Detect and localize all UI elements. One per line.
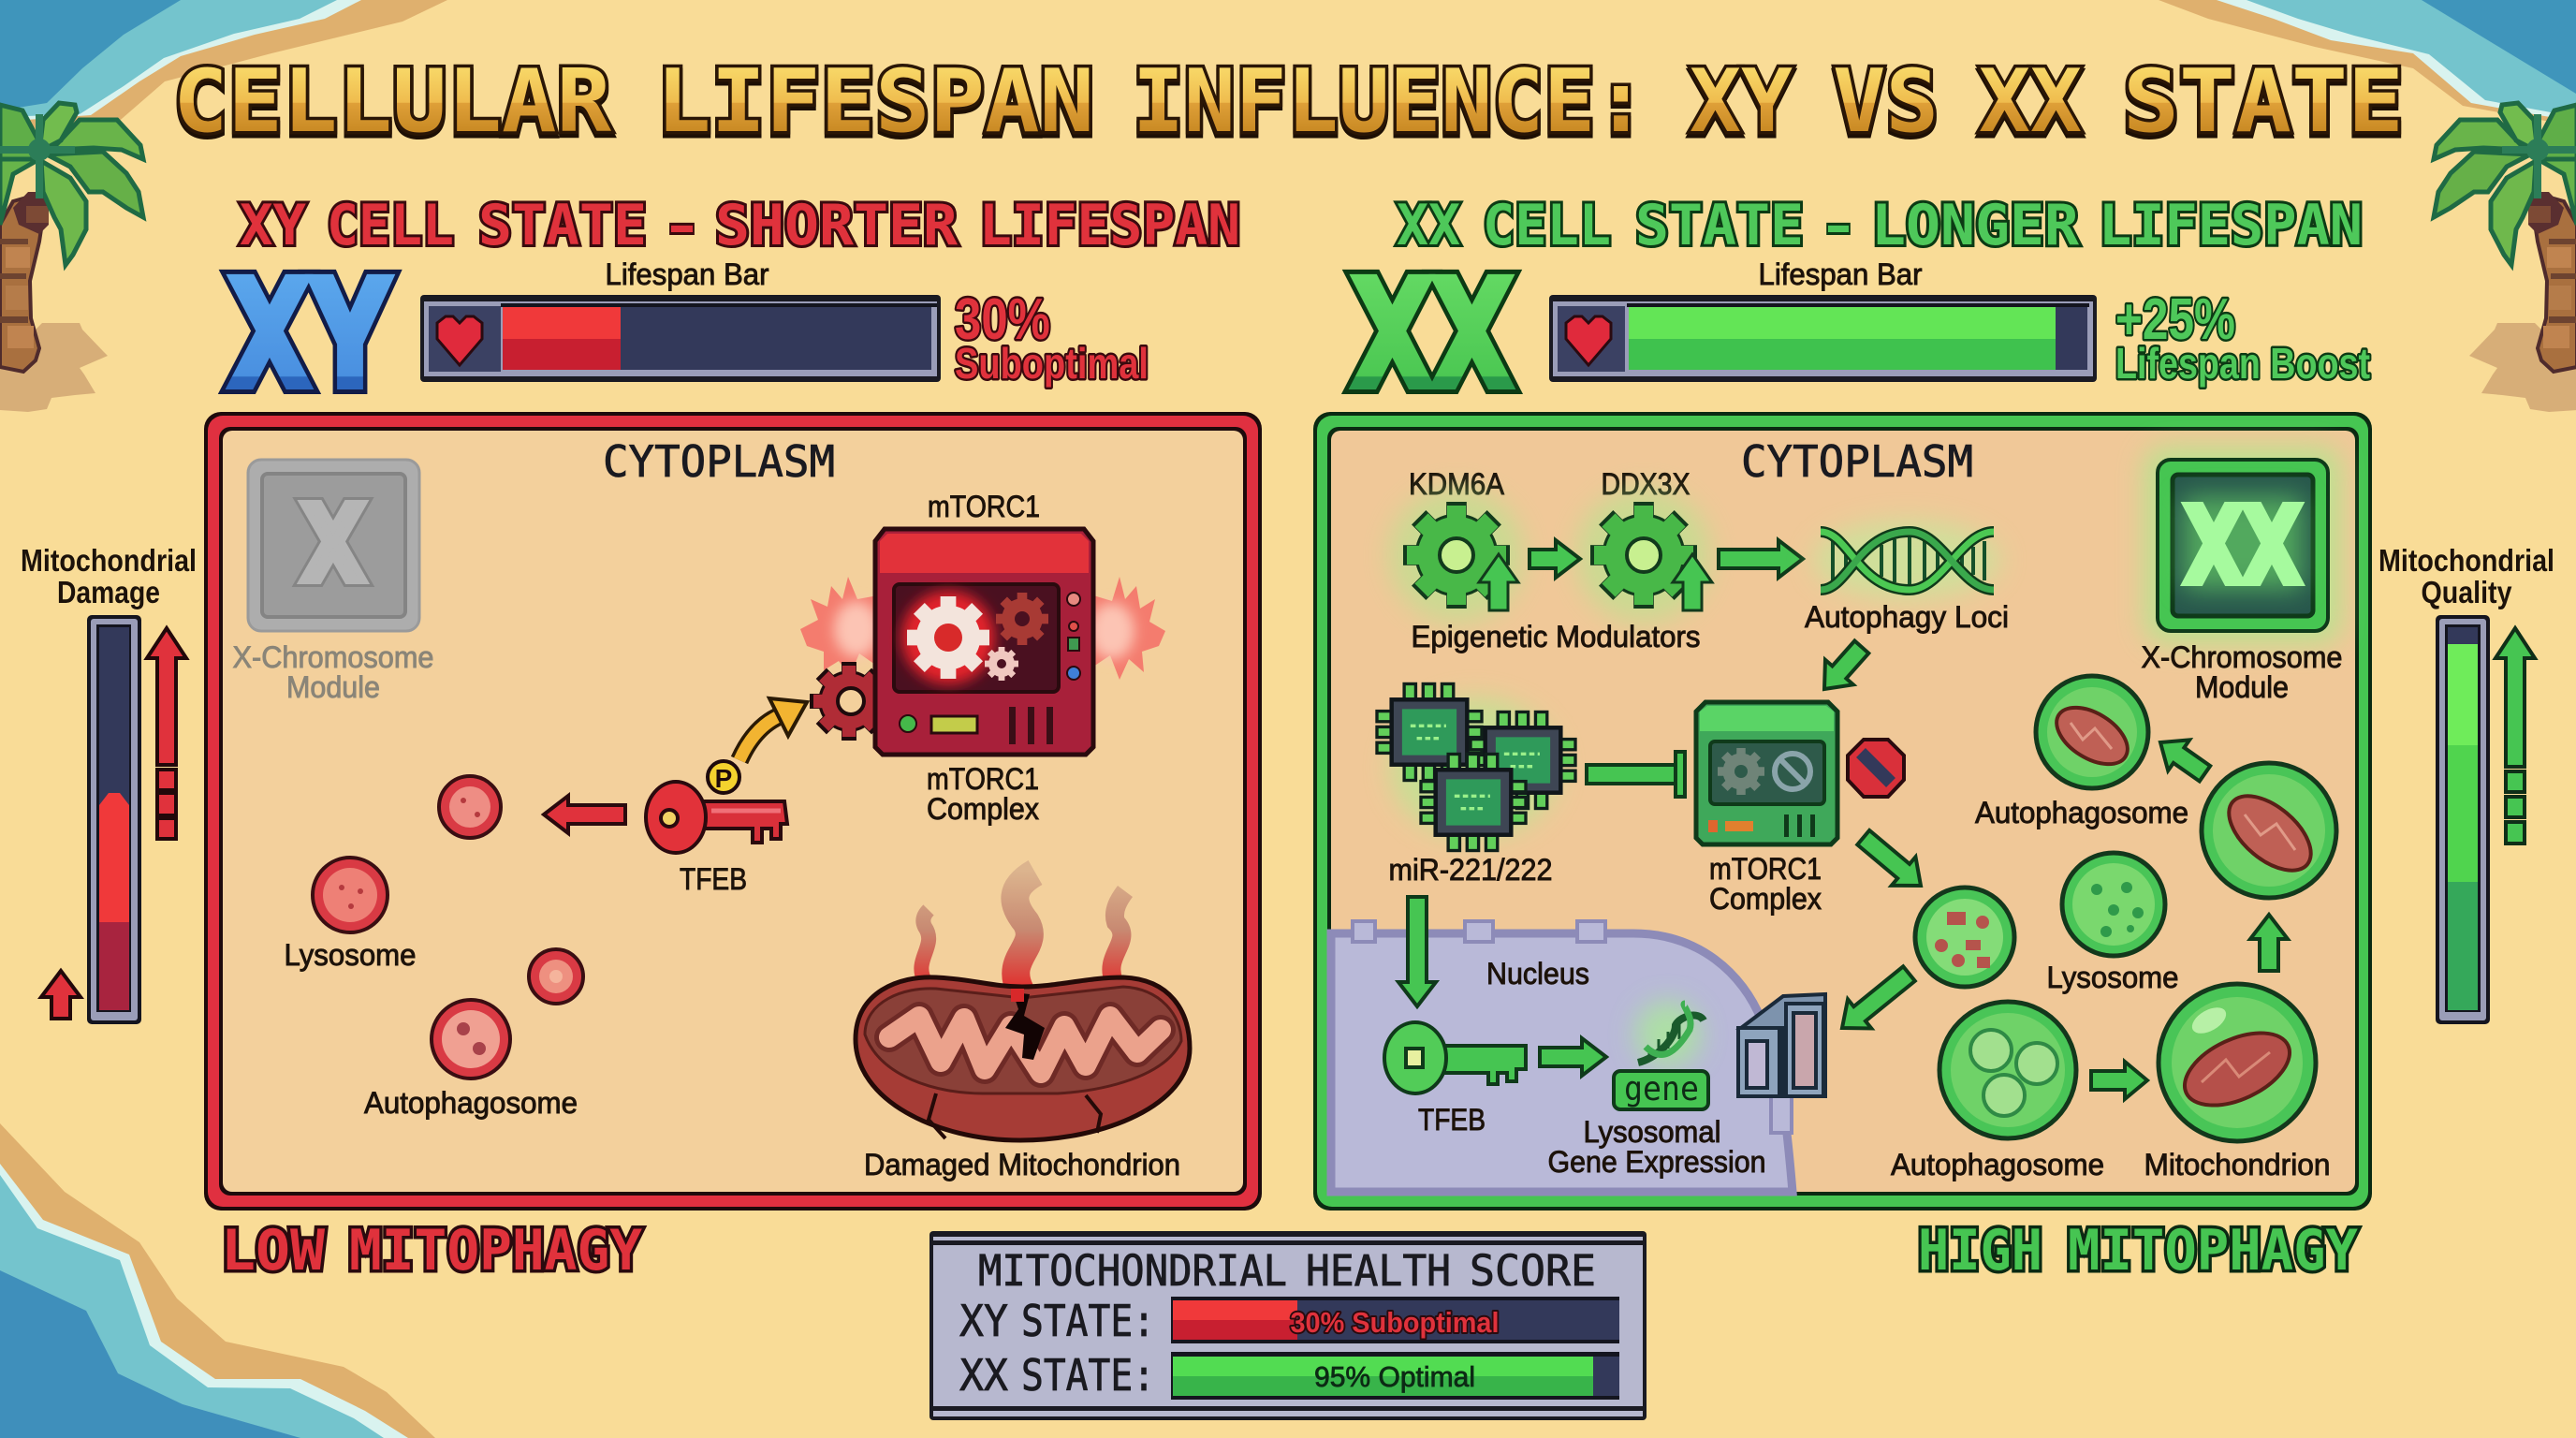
gauge label: mitochondrial quality: Mitochondrial bbox=[2378, 543, 2554, 578]
heading: score title: MITOCHONDRIAL bbox=[978, 1246, 1287, 1296]
arrow: miR to TFEB bbox=[1398, 897, 1436, 1006]
XY score bar: 30% Suboptimal bbox=[1290, 1306, 1500, 1339]
heading: XY cell state: XY bbox=[240, 193, 306, 258]
icon: XY badge: XY bbox=[229, 249, 390, 421]
label: XY state: STATE: bbox=[1021, 1296, 1155, 1346]
gauge label: mitochondrial damage: Damage bbox=[57, 575, 160, 609]
arrow: damage rising bbox=[147, 628, 186, 839]
icon: XX badge: XX bbox=[1353, 249, 1512, 421]
icon: smoke wisps bbox=[921, 873, 1125, 990]
label: high mitophagy bbox=[1918, 1218, 2358, 1284]
nucleus bbox=[1331, 921, 1793, 1192]
icon: KDM6A gear bbox=[1389, 488, 1524, 623]
scenery: top-right water bbox=[2159, 0, 2576, 126]
label: mTORC1 complex bbox=[927, 762, 1039, 826]
label: mitochondrion: Mitochondrion bbox=[2144, 1148, 2331, 1181]
heading: score title: SCORE bbox=[1470, 1246, 1596, 1296]
label: XX state: STATE: bbox=[1021, 1350, 1155, 1401]
icon: TFEB key bbox=[646, 782, 787, 853]
heading: XX cell state: XX bbox=[1397, 193, 1460, 258]
label: autophagosome: Autophagosome bbox=[1975, 796, 2188, 829]
title: XX bbox=[1979, 54, 2082, 155]
arrow: autophagosome to mitochondrion bbox=[2091, 1062, 2147, 1099]
heading: cytoplasm: CYTOPLASM bbox=[603, 436, 835, 487]
label: mTORC1 complex bbox=[1709, 852, 1822, 916]
icon: lysosome bbox=[2062, 853, 2165, 956]
heading: XX cell state: LONGER bbox=[1871, 193, 2080, 258]
label: lysosome: Lysosome bbox=[2046, 961, 2179, 994]
icon: autophagosome with mitochondrion bbox=[2036, 676, 2148, 788]
icon: heart bbox=[1566, 316, 1611, 365]
title: XY bbox=[1690, 51, 1793, 152]
icon: TFEB key bbox=[1384, 1022, 1526, 1093]
gauge: mitochondrial quality bbox=[2436, 615, 2490, 1024]
heading: XX cell state: STATE bbox=[1635, 193, 1804, 258]
icon: XX badge: XX bbox=[1353, 249, 1512, 421]
heading: score title: HEALTH bbox=[1306, 1246, 1451, 1296]
icon: engulfing vesicle bbox=[2202, 763, 2336, 898]
label: autophagosome: Autophagosome bbox=[1891, 1148, 2104, 1181]
label: lysosomal gene expression: Gene Expression bbox=[1548, 1145, 1765, 1179]
label: mTORC1 complex: Complex bbox=[927, 792, 1039, 826]
label: mTORC1 complex: mTORC1 bbox=[1709, 852, 1822, 886]
icon: inactive X-chromosome module: X bbox=[301, 484, 365, 606]
title: VS bbox=[1833, 54, 1939, 155]
heading: XX cell state bbox=[1397, 193, 2363, 258]
gauge: mitochondrial damage bbox=[87, 615, 141, 1024]
title: LIFESPAN bbox=[656, 54, 1094, 155]
label: X-chromosome module: Module bbox=[2195, 670, 2289, 704]
label: XY state bbox=[959, 1296, 1155, 1346]
icon: lysosome bbox=[313, 858, 388, 932]
label: X-chromosome module: Module bbox=[286, 670, 380, 704]
title bbox=[173, 51, 2404, 155]
label: XY state: XY bbox=[959, 1296, 1008, 1346]
label: DDX3X: DDX3X bbox=[1601, 467, 1690, 501]
heading: XY cell state: SHORTER bbox=[715, 193, 959, 258]
XX score bar bbox=[1171, 1352, 1619, 1400]
label: lysosomal gene expression bbox=[1548, 1115, 1765, 1179]
stat: +25% lifespan boost bbox=[2115, 287, 2370, 388]
arrow: vesicle to nuclear pore bbox=[1830, 960, 1921, 1043]
title: INFLUENCE: bbox=[1133, 54, 1647, 155]
icon: inactive X-chromosome module bbox=[248, 460, 419, 631]
arrow: DDX3X to autophagy loci bbox=[1719, 540, 1803, 578]
heading: XY cell state: STATE bbox=[478, 193, 647, 258]
scenery: bottom-left water bbox=[0, 1123, 435, 1438]
icon: X-chromosome module active bbox=[2144, 446, 2342, 645]
arrow: loci to mTORC1 bbox=[1810, 635, 1876, 701]
label: nucleus: Nucleus bbox=[1486, 957, 1589, 990]
heading: cytoplasm: CYTOPLASM bbox=[1741, 436, 1973, 487]
label: high mitophagy: HIGH bbox=[1918, 1218, 2042, 1284]
gauge label: mitochondrial damage: Mitochondrial bbox=[21, 543, 197, 578]
icon: autophagosome bbox=[432, 1000, 510, 1078]
label: low mitophagy: LOW bbox=[221, 1218, 326, 1284]
label: XX lifespan bar: Lifespan Bar bbox=[1758, 257, 1923, 291]
title: XY bbox=[1690, 54, 1793, 155]
label: X-chromosome module: X-Chromosome bbox=[232, 640, 434, 674]
icon: DDX3X gear bbox=[1576, 488, 1712, 623]
stat: 30% suboptimal: 30% bbox=[955, 287, 1050, 352]
label: autophagosome: Autophagosome bbox=[364, 1086, 578, 1120]
label: TFEB: TFEB bbox=[680, 862, 747, 896]
label: X-chromosome module bbox=[232, 640, 434, 704]
title: CELLULAR bbox=[173, 54, 611, 155]
arrow: blocked TFEB path bbox=[544, 796, 625, 833]
icon: phosphate P: P bbox=[715, 764, 732, 793]
title: STATE bbox=[2123, 51, 2404, 152]
icon: stop sign bbox=[1848, 740, 1904, 797]
heading: score title bbox=[978, 1246, 1596, 1296]
arrow: up to vesicle bbox=[2250, 915, 2288, 971]
icon: heart bbox=[437, 316, 482, 365]
title: STATE bbox=[2123, 54, 2404, 155]
label: KDM6A: KDM6A bbox=[1409, 467, 1505, 501]
title: VS bbox=[1833, 51, 1939, 152]
label: mTORC1 complex: mTORC1 bbox=[927, 762, 1039, 796]
icon: left palm tree bbox=[0, 103, 143, 412]
label: low mitophagy: MITOPHAGY bbox=[349, 1218, 642, 1284]
stat: +25% lifespan boost: Lifespan Boost bbox=[2115, 339, 2370, 388]
icon: right palm tree bbox=[2434, 103, 2576, 412]
scenery: top-left water bbox=[0, 0, 447, 131]
label: XX state bbox=[959, 1350, 1155, 1401]
title: XX bbox=[1979, 51, 2082, 152]
heading: XY cell state: CELL bbox=[327, 193, 454, 258]
icon: damaged mitochondrion bbox=[856, 977, 1190, 1140]
icon: mitochondrion in vesicle bbox=[2159, 984, 2316, 1141]
icon: small lysosome lower bbox=[529, 949, 583, 1004]
XX score bar: 95% Optimal bbox=[1314, 1360, 1475, 1393]
arrow: KDM6A to DDX3X bbox=[1530, 540, 1580, 578]
gauge label: mitochondrial damage bbox=[21, 543, 197, 609]
panel: mitochondrial health score bbox=[929, 1231, 1647, 1420]
arrow: phosphorylation bbox=[739, 698, 807, 760]
icon: digesting vesicle bbox=[1915, 888, 2014, 987]
icon: small lysosome bbox=[439, 776, 501, 838]
heading: XX cell state: LIFESPAN bbox=[2099, 193, 2363, 258]
icon: XY badge: XY bbox=[229, 249, 390, 421]
XY lifespan bar bbox=[420, 295, 941, 382]
XX lifespan bar bbox=[1549, 295, 2097, 382]
arrow: TFEB to gene bbox=[1540, 1038, 1606, 1076]
gauge label: mitochondrial quality: Quality bbox=[2421, 575, 2512, 609]
stat: 30% suboptimal: Suboptimal bbox=[955, 339, 1149, 388]
title: LIFESPAN bbox=[656, 51, 1094, 152]
icon: external gear bbox=[810, 662, 888, 741]
icon: DNA autophagy loci bbox=[1813, 521, 2000, 599]
panel: XX cell bbox=[1313, 412, 2372, 1211]
label: X-chromosome module: X-Chromosome bbox=[2142, 640, 2342, 674]
icon: energy bursts bbox=[800, 577, 1165, 680]
label: low mitophagy bbox=[221, 1218, 642, 1284]
label: XX state: XX bbox=[959, 1350, 1008, 1401]
label: autophagy loci: Autophagy Loci bbox=[1805, 600, 2009, 634]
icon: autophagosome lower bbox=[1939, 1002, 2076, 1138]
heading: XY cell state: – bbox=[671, 193, 694, 258]
panel: XY cell bbox=[204, 412, 1262, 1211]
XY score bar bbox=[1171, 1297, 1619, 1343]
gauge label: mitochondrial quality bbox=[2378, 543, 2554, 609]
heading: XY cell state bbox=[240, 193, 1240, 258]
icon: mTORC1 machine inhibited bbox=[1696, 702, 1837, 844]
icon: X-chromosome module active: XX bbox=[2185, 486, 2301, 608]
label: TFEB: TFEB bbox=[1418, 1103, 1486, 1137]
label: lysosomal gene expression: Lysosomal bbox=[1584, 1115, 1720, 1149]
label: miR-221/222: miR-221/222 bbox=[1389, 853, 1552, 887]
label: X-chromosome module bbox=[2142, 640, 2342, 704]
label: XY lifespan bar: Lifespan Bar bbox=[605, 257, 769, 291]
label: epigenetic modulators: Epigenetic Modulators bbox=[1412, 620, 1700, 653]
icon: phosphate P bbox=[708, 761, 739, 793]
heading: XX cell state: CELL bbox=[1483, 193, 1611, 258]
icon: mTORC1 machine bbox=[875, 529, 1093, 755]
icon: inactive X-chromosome module: X bbox=[301, 484, 365, 606]
icon: gene with DNA: gene bbox=[1624, 1070, 1699, 1108]
heading: XY cell state: LIFESPAN bbox=[979, 193, 1240, 258]
arrow: mTORC1 to vesicle bbox=[1852, 823, 1933, 900]
icon: miR-221/222 chips bbox=[1377, 683, 1575, 851]
label: mTORC1: mTORC1 bbox=[928, 490, 1040, 523]
label: mTORC1 complex: Complex bbox=[1709, 882, 1822, 916]
label: lysosome: Lysosome bbox=[285, 938, 416, 972]
stat: +25% lifespan boost: +25% bbox=[2115, 287, 2235, 352]
title: CELLULAR bbox=[173, 51, 611, 152]
arrow: to autophagosome bbox=[2150, 727, 2216, 789]
inhibition line bbox=[1587, 752, 1685, 797]
title: INFLUENCE: bbox=[1133, 51, 1647, 152]
stat: 30% suboptimal bbox=[955, 287, 1149, 388]
arrow: quality rising bbox=[2496, 628, 2535, 844]
icon: gene with DNA bbox=[1614, 1001, 1708, 1109]
label: high mitophagy: MITOPHAGY bbox=[2068, 1218, 2358, 1284]
icon: nuclear pore bbox=[1738, 994, 1825, 1096]
heading: XX cell state: – bbox=[1828, 193, 1850, 258]
label: damaged mitochondrion: Damaged Mitochondrion bbox=[864, 1148, 1180, 1181]
arrow: small damage up bbox=[41, 971, 80, 1019]
